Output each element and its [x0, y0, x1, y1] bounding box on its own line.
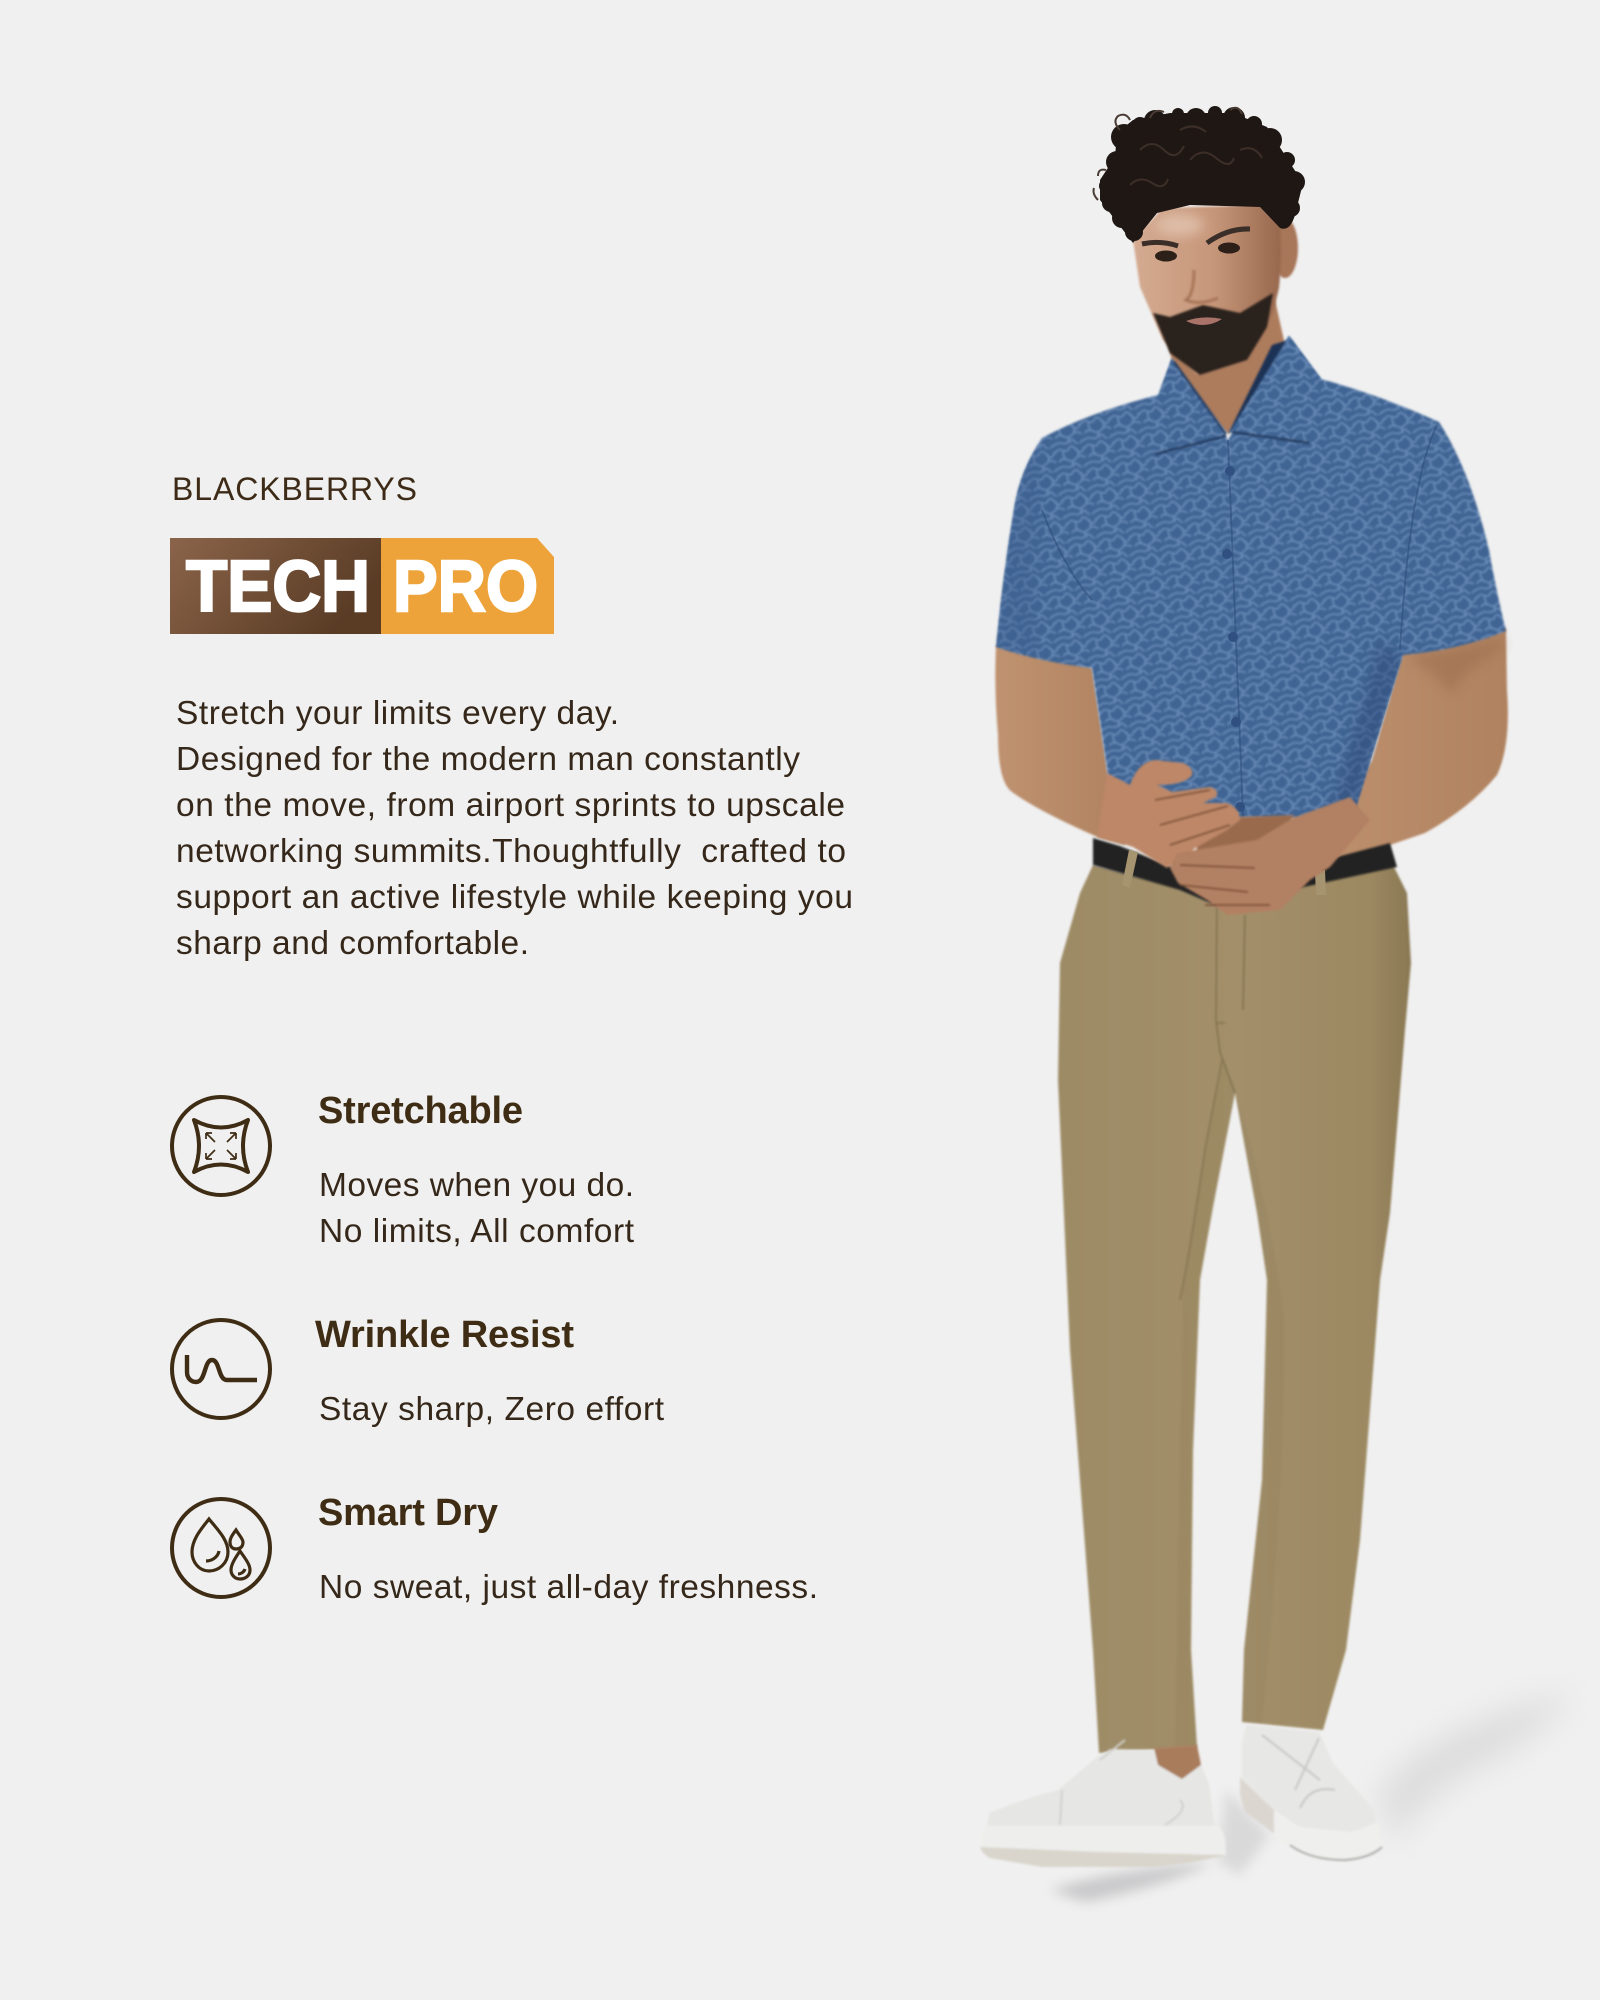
intro paragraph: Stretch your limits every day. [176, 695, 619, 732]
shoes [980, 1725, 1382, 1867]
trouser shading: inner legs [1175, 1060, 1235, 1748]
page canvas [170, 106, 1550, 1906]
logo: Tech Pro [170, 538, 554, 634]
belt loops [1122, 850, 1326, 895]
icon: stretch fabric [172, 1097, 270, 1195]
intro paragraph [176, 695, 853, 962]
trousers [1058, 865, 1411, 1753]
model figure [995, 106, 1575, 1902]
icon: water drops [172, 1499, 270, 1597]
hair curl highlights [1130, 126, 1262, 186]
collar [1155, 336, 1321, 454]
arms [995, 628, 1508, 880]
feature: Smart Dry [172, 1492, 818, 1606]
hand: left [1097, 760, 1240, 868]
brand name: BLACKBERRYS [172, 471, 417, 507]
fly seam [1216, 905, 1245, 1093]
shirt [996, 336, 1506, 818]
ear [1272, 218, 1298, 278]
hands [1097, 760, 1370, 915]
description: Stretchable: Moves when you do. [319, 1167, 634, 1204]
logo: Tech Pro: TECH [186, 547, 370, 627]
description: Wrinkle Resist: Stay sharp, Zero effort [319, 1391, 665, 1428]
shirt shading and seams [996, 425, 1437, 820]
icon: wrinkle line [172, 1320, 270, 1418]
arm shading [1410, 640, 1505, 695]
intro paragraph: sharp and comfortable. [176, 925, 529, 962]
neck inner collar shadow [1228, 340, 1288, 434]
face [1133, 205, 1281, 375]
finger creases [1155, 790, 1270, 905]
heading: Wrinkle Resist: Wrinkle Resist [315, 1314, 574, 1356]
eyes and brows [1142, 229, 1250, 262]
logo: Tech Pro: PRO [393, 547, 538, 627]
shoe: left [980, 1740, 1226, 1867]
belt [1093, 838, 1397, 905]
mouth [1186, 317, 1222, 325]
intro paragraph: support an active lifestyle while keeping you [176, 879, 853, 916]
heading: Smart Dry: Smart Dry [318, 1492, 498, 1534]
palm shadow behind hands [1195, 815, 1295, 855]
neck [1168, 300, 1285, 434]
nose shadow [1186, 270, 1218, 303]
hair wisps [1094, 108, 1242, 200]
shirt buttons [1222, 466, 1245, 812]
forehead highlight [1156, 214, 1204, 236]
intro paragraph: Designed for the modern man constantly [176, 741, 800, 778]
heading: Stretchable: Stretchable [318, 1090, 523, 1132]
beard [1153, 293, 1273, 375]
feature: Wrinkle Resist [172, 1314, 665, 1428]
floor shadows [1050, 1692, 1575, 1902]
hand: right [1170, 797, 1370, 915]
feature: Stretchable [172, 1090, 635, 1250]
description: Stretchable: No limits, All comfort [319, 1213, 635, 1250]
shoe: right [1240, 1725, 1382, 1860]
description: Stretchable [319, 1167, 635, 1250]
description: Smart Dry: No sweat, just all-day freshness. [319, 1569, 818, 1606]
intro paragraph: networking summits.Thoughtfully crafted to [176, 833, 846, 870]
intro paragraph: on the move, from airport sprints to upscale [176, 787, 845, 824]
hair [1099, 106, 1305, 243]
